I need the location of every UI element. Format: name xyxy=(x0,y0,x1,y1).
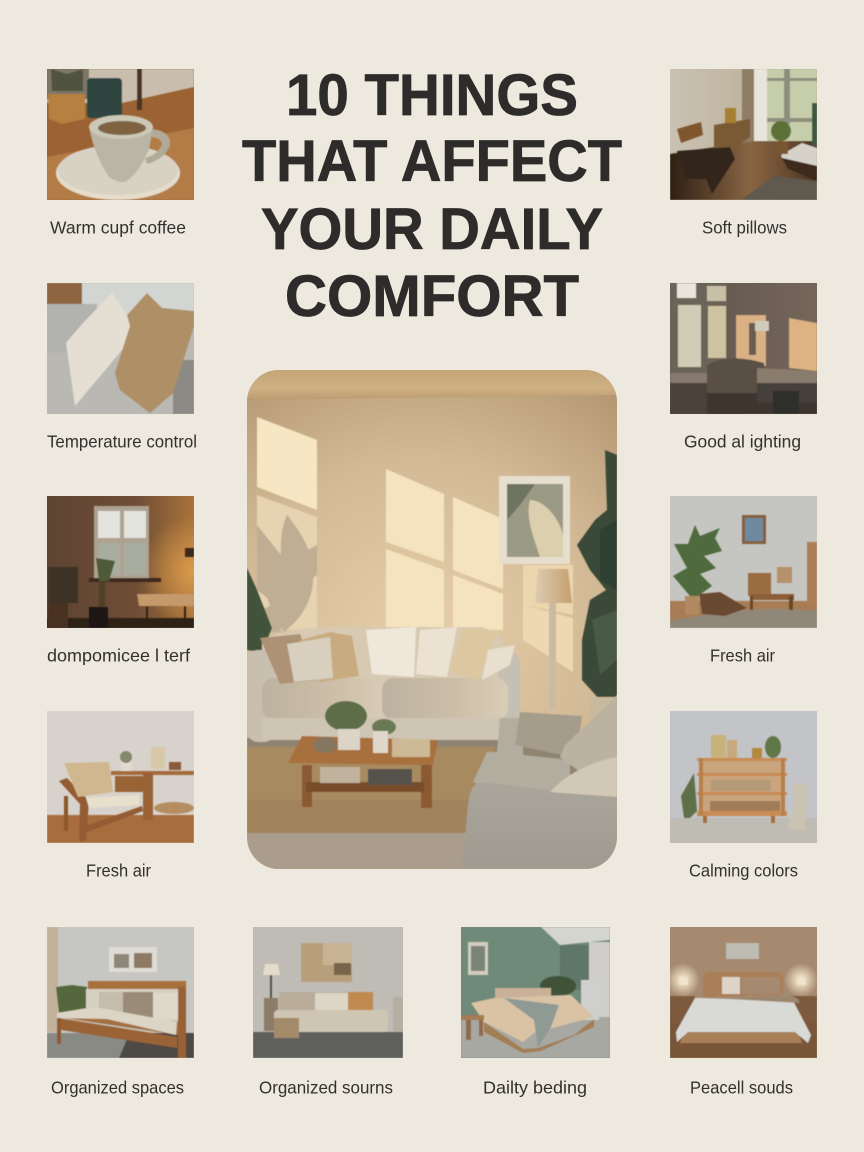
title: THAT AFFECT xyxy=(242,129,622,194)
thumbnail: bedroom with green wall xyxy=(461,927,610,1058)
thumbnail: wooden chair xyxy=(47,711,194,843)
plant left xyxy=(247,568,272,652)
label: Warm cupf coffee xyxy=(50,218,186,238)
thumbnail: dim room with light patches xyxy=(670,283,817,414)
label: Temperature control xyxy=(47,432,197,452)
label: Good al ighting xyxy=(684,432,801,452)
title: COMFORT xyxy=(285,264,579,329)
label: Organized spaces xyxy=(51,1078,184,1098)
thumbnail: wooden shelf xyxy=(670,711,817,843)
label: Fresh air xyxy=(86,860,151,880)
floor xyxy=(247,738,578,776)
thumbnail: warm room with window xyxy=(47,496,249,628)
label: Dailty beding xyxy=(483,1078,587,1098)
label: Peacell souds xyxy=(690,1078,793,1098)
thumbnail: bedroom with lamps xyxy=(666,927,818,1058)
floor lamp xyxy=(535,569,572,710)
label: Soft pillows xyxy=(702,218,787,238)
table plants and books xyxy=(313,701,430,757)
label: Fresh air xyxy=(710,646,775,666)
label: Calming colors xyxy=(689,860,798,880)
sofa cushions xyxy=(260,627,515,684)
sofa xyxy=(247,627,520,742)
thumbnail: beige sofa living room xyxy=(253,927,403,1058)
title: YOUR DAILY xyxy=(261,197,603,262)
thumbnail: plant room xyxy=(670,496,817,628)
thumbnail: warm cup of coffee xyxy=(47,69,194,200)
title: 10 THINGS xyxy=(286,63,578,128)
label: Organized sourns xyxy=(259,1078,393,1098)
coffee table xyxy=(288,736,438,808)
armchair with throw xyxy=(462,695,617,869)
leaf shadow on wall xyxy=(257,515,317,632)
thumbnail: wooden bench sofa xyxy=(47,927,194,1058)
plant right xyxy=(577,450,617,700)
title xyxy=(242,63,622,329)
framed wall art xyxy=(499,476,570,564)
sunlight patches on wall xyxy=(257,417,573,672)
panel: main living room photo xyxy=(247,370,617,869)
thumbnail: soft pillows xyxy=(47,283,194,414)
plant pot xyxy=(590,696,616,718)
thumbnail: sunlit room with desk xyxy=(670,69,817,200)
rug xyxy=(247,746,495,800)
label: dompomicee l terf xyxy=(47,646,190,666)
